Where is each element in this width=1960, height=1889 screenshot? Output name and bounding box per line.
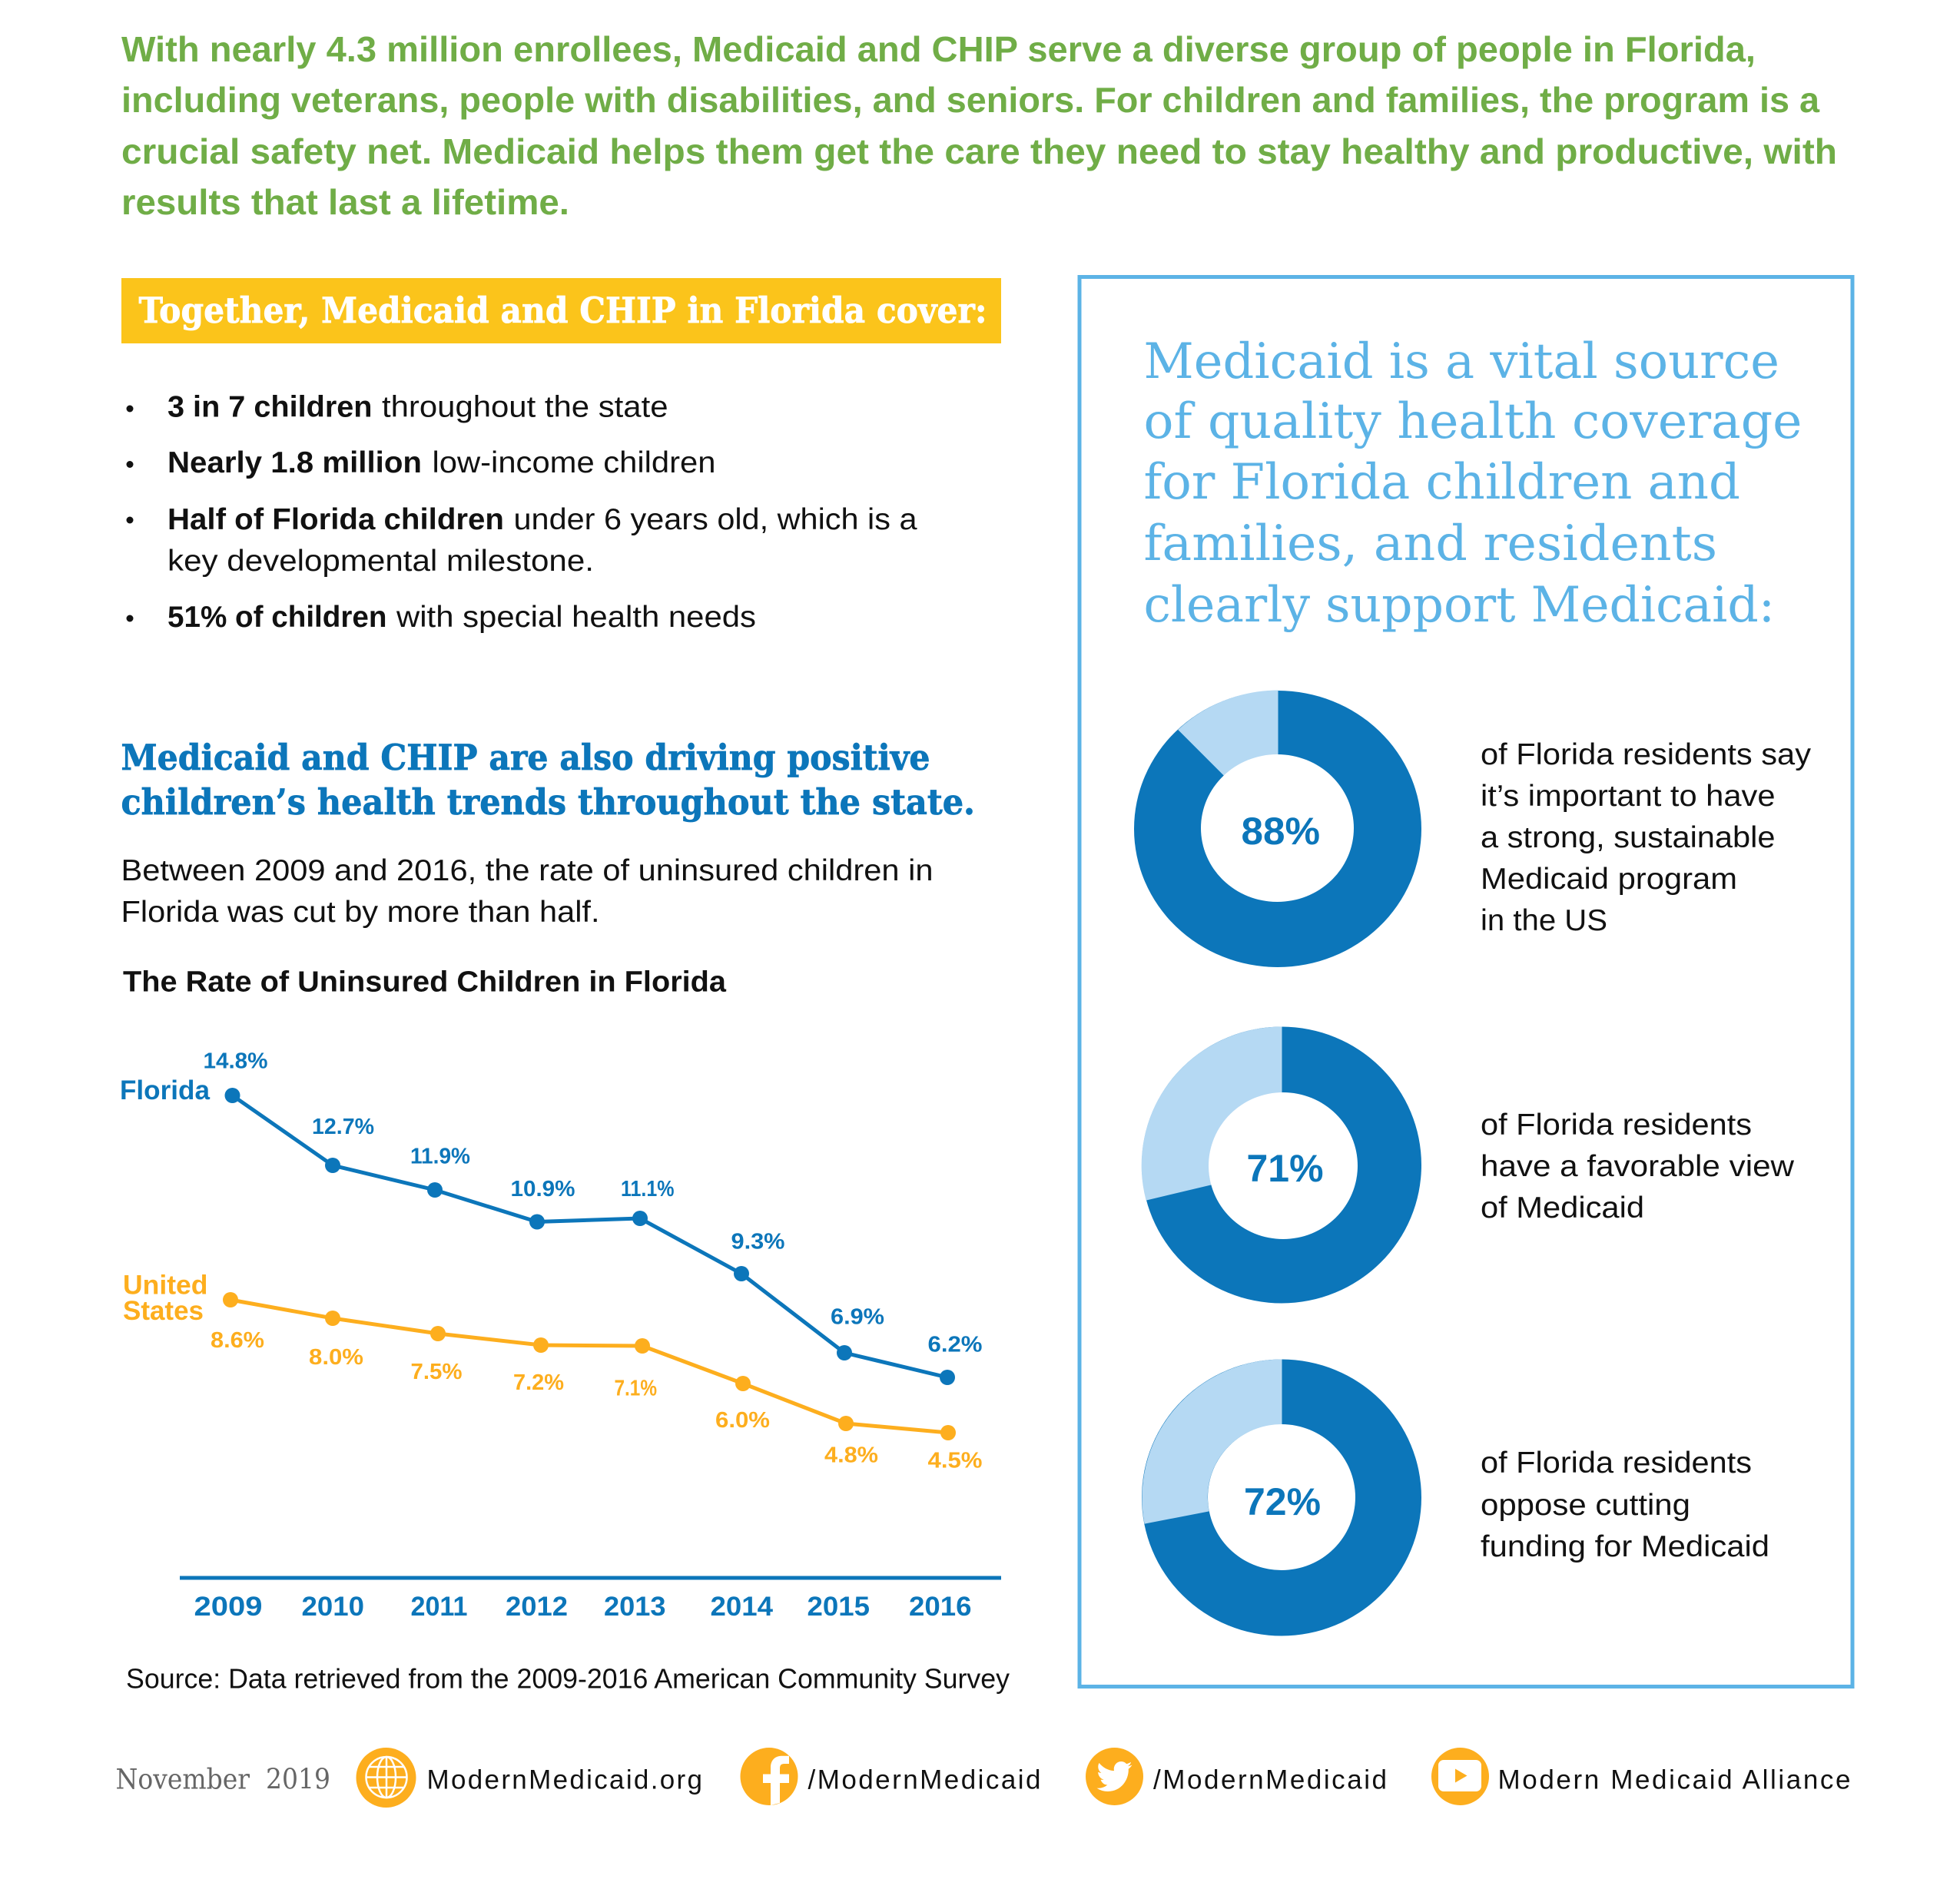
United States value labels bbox=[211, 1328, 983, 1473]
series label: Florida: Florida bbox=[120, 1075, 211, 1105]
donut chart: 88% bbox=[1134, 691, 1421, 967]
chart title: The Rate of Uninsured Children in Florida bbox=[123, 966, 727, 999]
icon: youtube bbox=[1431, 1748, 1489, 1805]
panel heading: clearly support Medicaid: bbox=[1143, 577, 1775, 634]
caption: 72%: funding for Medicaid bbox=[1481, 1530, 1769, 1563]
facebook handle: /ModernMedicaid bbox=[808, 1765, 1040, 1795]
donut chart: 71% bbox=[1142, 1026, 1421, 1303]
Florida value labels: 11.9% bbox=[410, 1145, 470, 1169]
caption: 88%: a strong, sustainable bbox=[1481, 821, 1775, 854]
series label: United States: States bbox=[123, 1296, 204, 1326]
coverage bullet list: Half of Florida children bbox=[167, 503, 504, 536]
United States value labels: 7.2% bbox=[513, 1370, 564, 1395]
panel: resident support bbox=[1079, 277, 1852, 1687]
Florida value labels bbox=[203, 1049, 983, 1357]
caption: 72%: of Florida residents bbox=[1481, 1447, 1752, 1480]
Florida value labels: 6.2% bbox=[928, 1332, 983, 1357]
United States value labels: 8.0% bbox=[309, 1345, 363, 1370]
panel heading: families, and residents bbox=[1143, 515, 1717, 572]
panel heading: Medicaid is a vital source bbox=[1143, 333, 1779, 390]
Florida line series bbox=[224, 1088, 955, 1385]
x axis with years: 2011 bbox=[410, 1592, 467, 1622]
caption: 88%: it’s important to have bbox=[1481, 780, 1775, 813]
date: November 2019 bbox=[115, 1764, 330, 1796]
x axis with years: 2013 bbox=[604, 1592, 665, 1622]
uninsured trend text: Between 2009 and 2016, the rate of uninsured children in bbox=[121, 854, 933, 887]
icon: globe bbox=[357, 1748, 416, 1808]
Florida value labels: 11.1% bbox=[621, 1177, 675, 1201]
caption: 71%: of Florida residents bbox=[1481, 1109, 1752, 1142]
Florida value labels: 14.8% bbox=[203, 1049, 268, 1074]
United States line series bbox=[223, 1292, 956, 1440]
blue section heading: Medicaid and CHIP are also driving positive bbox=[121, 737, 930, 778]
intro paragraph: results that last a lifetime. bbox=[121, 182, 569, 222]
United States value labels: 7.1% bbox=[615, 1377, 657, 1401]
panel heading: for Florida children and bbox=[1143, 454, 1740, 511]
yellow banner heading: Together, Medicaid and CHIP in Florida cover: bbox=[138, 290, 987, 331]
donut chart: 72%: 72% bbox=[1244, 1480, 1321, 1523]
Florida value labels: 6.9% bbox=[831, 1304, 884, 1329]
coverage bullet list: 3 in 7 children bbox=[167, 390, 372, 424]
Florida value labels: 12.7% bbox=[312, 1115, 374, 1139]
coverage bullet list: 51% of children bbox=[167, 601, 387, 634]
caption: 72% bbox=[1481, 1447, 1769, 1563]
source note: Source: Data retrieved from the 2009-2016 American Community Survey bbox=[126, 1662, 1010, 1695]
coverage bullet list: low-income children bbox=[432, 446, 716, 479]
intro paragraph: crucial safety net. Medicaid helps them get the care they need to stay healthy and productive, with bbox=[121, 131, 1837, 171]
coverage bullet list: Nearly 1.8 million bbox=[167, 446, 422, 479]
United States value labels: 8.6% bbox=[211, 1328, 264, 1353]
x axis with years: 2010 bbox=[301, 1592, 364, 1622]
caption: 88% bbox=[1481, 738, 1812, 937]
x axis with years: 2009 bbox=[194, 1592, 263, 1622]
line chart: uninsured rate bbox=[120, 1049, 1001, 1622]
x axis with years: 2014 bbox=[710, 1592, 774, 1622]
caption: 71%: have a favorable view bbox=[1481, 1150, 1795, 1183]
United States value labels: 4.8% bbox=[824, 1443, 878, 1467]
caption: 88%: Medicaid program bbox=[1481, 863, 1737, 896]
United States value labels: 6.0% bbox=[715, 1408, 770, 1433]
series label: United States: United bbox=[123, 1271, 207, 1300]
x axis with years: 2016 bbox=[909, 1592, 971, 1622]
x axis with years bbox=[180, 1578, 1001, 1622]
twitter handle: /ModernMedicaid bbox=[1153, 1765, 1387, 1795]
intro paragraph: With nearly 4.3 million enrollees, Medicaid and CHIP serve a diverse group of people in Florida, bbox=[121, 29, 1756, 69]
caption: 72%: oppose cutting bbox=[1481, 1489, 1690, 1522]
blue section heading bbox=[121, 737, 975, 823]
website link: ModernMedicaid.org bbox=[427, 1765, 702, 1795]
x axis with years: 2012 bbox=[506, 1592, 568, 1622]
x axis with years: 2015 bbox=[807, 1592, 870, 1622]
caption: 71% bbox=[1481, 1109, 1795, 1225]
United States value labels: 7.5% bbox=[410, 1360, 463, 1384]
yellow banner heading bbox=[121, 278, 1001, 343]
intro paragraph: including veterans, people with disabilities, and seniors. For children and families, the program is a bbox=[121, 80, 1819, 120]
uninsured trend text bbox=[121, 854, 933, 929]
caption: 88%: of Florida residents say bbox=[1481, 738, 1812, 771]
donut chart: 71%: 71% bbox=[1246, 1147, 1323, 1190]
panel heading: of quality health coverage bbox=[1143, 393, 1802, 450]
Florida value labels: 9.3% bbox=[731, 1229, 785, 1254]
panel heading bbox=[1143, 333, 1802, 634]
icon: twitter bbox=[1086, 1748, 1143, 1805]
series label: United States bbox=[123, 1271, 207, 1326]
blue section heading: children’s health trends throughout the state. bbox=[121, 781, 975, 823]
caption: 71%: of Medicaid bbox=[1481, 1191, 1644, 1225]
coverage bullet list: throughout the state bbox=[382, 390, 668, 424]
donut chart: 88%: 88% bbox=[1242, 810, 1320, 853]
coverage bullet list: with special health needs bbox=[396, 601, 756, 634]
donut chart: 72% bbox=[1142, 1360, 1421, 1636]
footer bbox=[115, 1748, 1850, 1808]
uninsured trend text: Florida was cut by more than half. bbox=[121, 896, 599, 929]
coverage bullet list: key developmental milestone. bbox=[167, 545, 594, 578]
intro paragraph bbox=[121, 29, 1837, 222]
coverage bullet list: under 6 years old, which is a bbox=[513, 503, 917, 536]
youtube channel: Modern Medicaid Alliance bbox=[1498, 1765, 1850, 1795]
caption: 88%: in the US bbox=[1481, 904, 1607, 937]
United States value labels: 4.5% bbox=[928, 1449, 983, 1473]
icon: facebook bbox=[741, 1748, 798, 1805]
Florida value labels: 10.9% bbox=[510, 1177, 575, 1201]
coverage bullet list bbox=[126, 390, 917, 634]
